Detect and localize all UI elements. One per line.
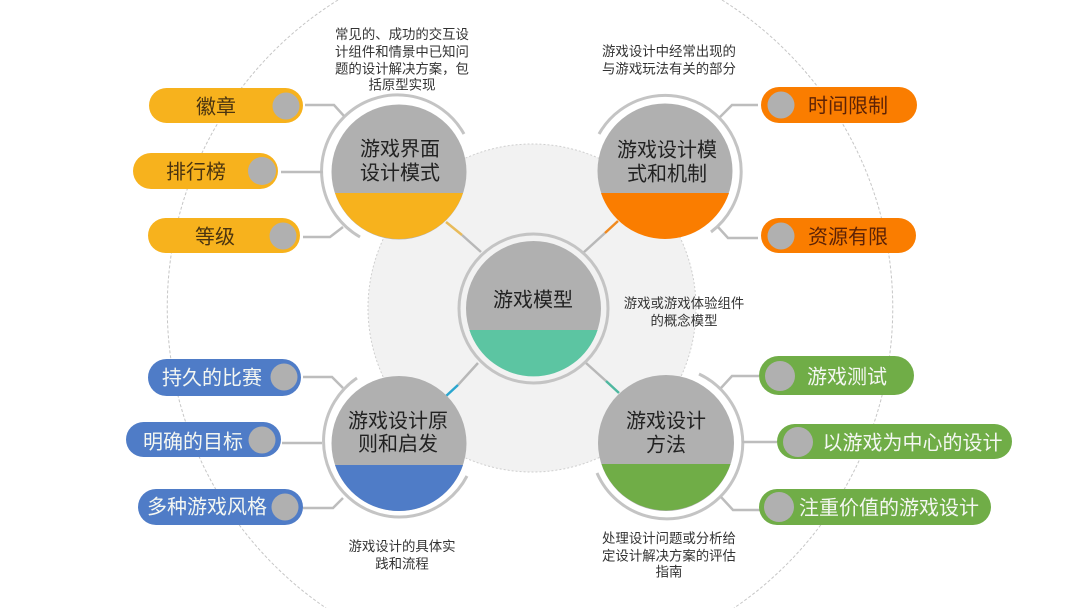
panel: bottom-right topic: 方法: [646, 434, 686, 456]
description: top-left topic: 括原型实现: [369, 77, 435, 92]
connectors: top-left: [281, 105, 344, 237]
pill: 排行榜: 排行榜: [166, 160, 226, 184]
description: bottom-right topic: 定设计解决方案的评估: [602, 548, 736, 563]
pill: 时间限制: 时间限制: [808, 94, 888, 118]
pill: 明确的目标: 明确的目标: [143, 430, 243, 454]
pill: 多种游戏风格: 多种游戏风格: [147, 496, 267, 518]
pill: 以游戏为中心的设计: [777, 424, 1012, 459]
panel: bottom-right topic: [597, 374, 743, 519]
pill: 游戏测试: [759, 356, 914, 395]
connectors from centre to the four topics: [445, 221, 619, 397]
panel: bottom-left topic: 游戏设计原: [348, 410, 448, 432]
description: centre node: 游戏或游戏体验组件: [624, 296, 744, 311]
pill: 以游戏为中心的设计: 以游戏为中心的设计: [822, 432, 1002, 454]
connectors: top-right: [718, 105, 758, 238]
panel: top-left topic: 游戏界面: [360, 138, 440, 160]
description: top-right topic: 游戏设计中经常出现的: [602, 44, 736, 59]
pill: 持久的比赛: [148, 359, 301, 396]
pill: 多种游戏风格: [138, 489, 303, 525]
connectors: bottom-left: [282, 377, 343, 508]
pill: 等级: 等级: [195, 226, 235, 248]
description: top-left topic: 题的设计解决方案，包: [335, 61, 469, 76]
connectors: bottom-right: [721, 376, 777, 510]
pill: 徽章: 徽章: [196, 96, 236, 118]
description: bottom-left topic: 游戏设计的具体实: [348, 539, 456, 554]
panel: top-left topic: 设计模式: [360, 162, 440, 184]
description: centre node: 的概念模型: [651, 312, 717, 328]
pill: 资源有限: [761, 218, 916, 253]
description: top-right topic: 与游戏玩法有关的部分: [602, 61, 736, 76]
panel: bottom-left topic: [324, 376, 467, 517]
description: bottom-left topic: 践和流程: [375, 556, 429, 571]
pill: 明确的目标: [126, 422, 281, 457]
description: bottom-right topic: 指南: [656, 564, 682, 579]
pill: 时间限制: [761, 87, 917, 123]
outer dashed ring: [167, 0, 893, 608]
panel: bottom-right topic: 游戏设计: [626, 410, 706, 432]
pill: 徽章: [149, 88, 303, 123]
pill: 注重价值的游戏设计: [759, 489, 991, 525]
pill: 等级: [148, 218, 300, 253]
pill: 资源有限: 资源有限: [808, 226, 888, 248]
panel: top-right topic: 游戏设计模: [617, 138, 717, 162]
panel: top-right topic: [598, 95, 741, 239]
panel: bottom-left topic: 则和启发: [358, 432, 438, 456]
panel: centre node: [459, 234, 608, 383]
description: top-left topic: 常见的、成功的交互设: [335, 27, 469, 42]
panel: top-left topic: [322, 95, 466, 240]
panel: centre node: 游戏模型: [493, 288, 573, 312]
description: bottom-right topic: 处理设计问题或分析给: [602, 531, 736, 546]
description: top-left topic: 计组件和情景中已知问: [335, 43, 469, 59]
panel: top-right topic: 式和机制: [627, 162, 707, 186]
pill: 游戏测试: 游戏测试: [807, 366, 887, 388]
pill: 排行榜: [133, 153, 278, 189]
pill: 注重价值的游戏设计: 注重价值的游戏设计: [799, 496, 979, 520]
pill: 持久的比赛: 持久的比赛: [162, 366, 262, 390]
inner gray background disc: [368, 144, 696, 472]
